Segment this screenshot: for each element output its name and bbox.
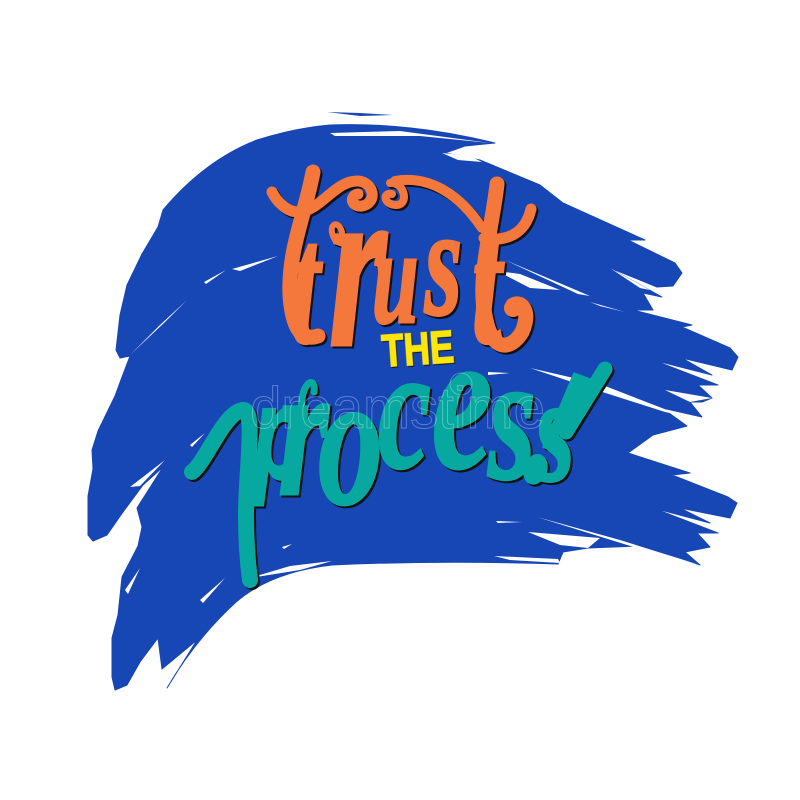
title word: process!: c <box>378 313 431 506</box>
stray top brush hair <box>327 112 393 116</box>
title word: process!: r <box>278 326 330 536</box>
title word: process! <box>192 289 613 580</box>
title word: trust: s <box>424 176 462 348</box>
title word: trust: u <box>372 203 419 352</box>
flourish: long p stem <box>192 410 250 580</box>
exclamation mark: ! <box>499 328 613 527</box>
flourish: swirled t crossbars and stems <box>272 172 531 345</box>
title word: trust: t <box>472 188 505 379</box>
ball terminal of the t <box>504 299 522 317</box>
flourish: r loop <box>301 382 314 415</box>
watermark: dreamstime <box>250 376 545 441</box>
word: THE: THE <box>380 321 456 377</box>
title word: trust: t <box>290 188 323 379</box>
white bristle streaks <box>125 131 712 603</box>
title word: process!: e <box>432 289 492 510</box>
flourish: exclamation taper <box>566 369 605 432</box>
title word: trust: r <box>329 132 388 398</box>
title word: process!: p <box>251 360 307 506</box>
title word: process!: s <box>534 347 575 513</box>
title word: trust <box>272 132 531 398</box>
panel: blue brush stroke <box>88 112 738 690</box>
title word: process!: o <box>318 335 383 545</box>
title word: process!: s <box>487 319 536 518</box>
